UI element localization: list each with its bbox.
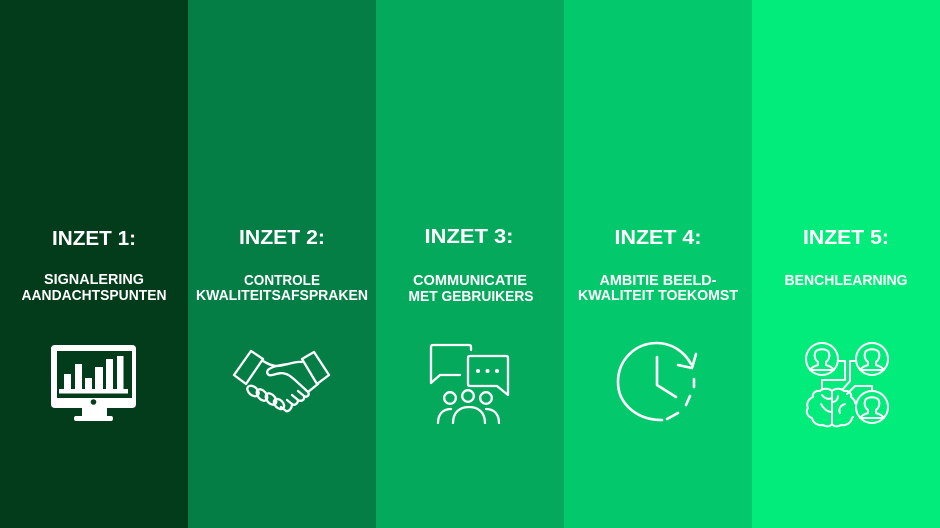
heading: inzet 1: INZET 1: xyxy=(52,228,136,250)
text: ambitie beeldkwaliteit toekomst xyxy=(578,272,738,304)
panel: inzet 5 xyxy=(752,0,940,528)
text: signalering aandachtspunten xyxy=(22,271,166,304)
icon: clock with arrow xyxy=(618,343,696,420)
text: benchlearning: BENCHLEARNING xyxy=(784,272,908,289)
icon: speech bubbles and people xyxy=(431,345,508,423)
panel: inzet 1 xyxy=(0,0,188,528)
text: signalering aandachtspunten: AANDACHTSPUNTEN xyxy=(22,287,166,304)
text: ambitie beeldkwaliteit toekomst: AMBITIE BEELD- xyxy=(600,272,716,289)
heading: inzet 2: INZET 2: xyxy=(239,227,325,249)
panel: inzet 3 xyxy=(376,0,564,528)
icon: monitor with bar chart xyxy=(51,345,136,421)
text: communicatie met gebruikers xyxy=(408,272,534,305)
icon: handshake xyxy=(234,351,329,411)
text: controle kwaliteitsafspraken: KWALITEITSAFSPRAKEN xyxy=(196,287,368,304)
heading: inzet 5: INZET 5: xyxy=(803,227,889,249)
text: communicatie met gebruikers: MET GEBRUIKERS xyxy=(408,288,534,305)
text: controle kwaliteitsafspraken xyxy=(196,272,368,304)
text: controle kwaliteitsafspraken: CONTROLE xyxy=(244,272,320,289)
heading: inzet 3: INZET 3: xyxy=(424,226,514,248)
icon: people connected to brain xyxy=(806,343,888,426)
text: signalering aandachtspunten: SIGNALERING xyxy=(44,271,144,288)
panel: inzet 2 xyxy=(188,0,376,528)
text: communicatie met gebruikers: COMMUNICATIE xyxy=(413,272,527,289)
text: ambitie beeldkwaliteit toekomst: KWALITEIT TOEKOMST xyxy=(578,287,738,304)
heading: inzet 4: INZET 4: xyxy=(614,227,702,249)
panel: inzet 4 xyxy=(564,0,752,528)
